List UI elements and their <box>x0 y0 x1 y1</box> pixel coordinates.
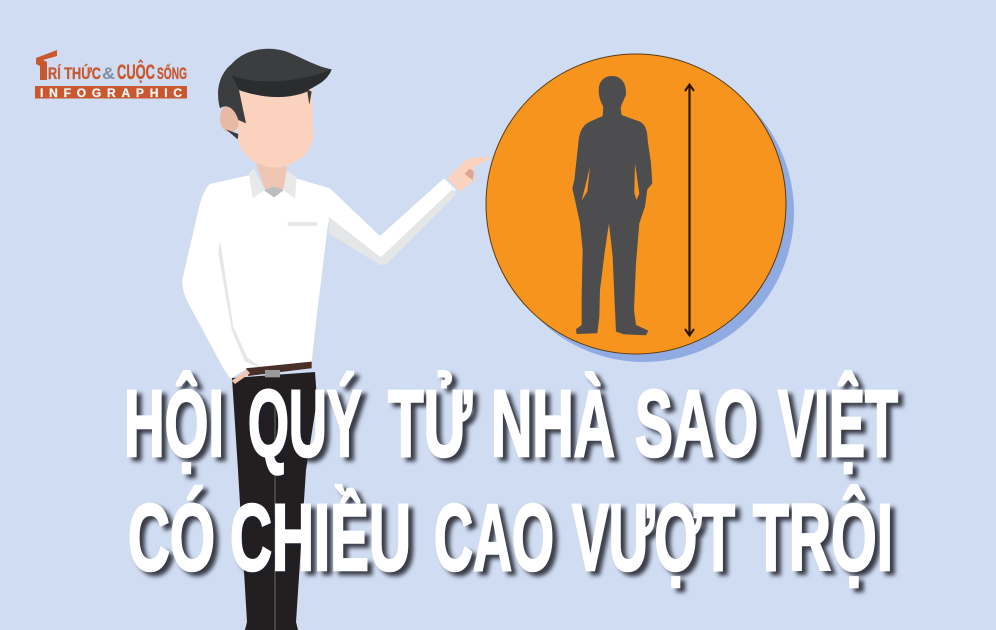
logo: Tri Thuc & Cuoc Song Infographic: CUỘC <box>117 60 155 84</box>
character: man pointing at circle <box>182 49 492 630</box>
title <box>124 371 898 591</box>
title line 1: SAO <box>635 371 758 477</box>
title line 2: VƯỢT <box>572 485 735 591</box>
logo: Tri Thuc & Cuoc Song Infographic: RÍ THỨC <box>48 64 101 83</box>
hair <box>218 49 332 139</box>
shirt <box>182 175 457 378</box>
title line 2 <box>128 485 893 591</box>
title line 2: CÓ <box>128 485 215 591</box>
face <box>238 87 313 167</box>
logo: Tri Thuc & Cuoc Song Infographic: INFOGRAPHIC <box>40 86 182 100</box>
logo: Tri Thuc & Cuoc Song Infographic: & <box>102 64 115 83</box>
belt and buckle <box>246 362 312 377</box>
title line 2: CAO <box>434 485 554 591</box>
trousers <box>232 372 317 630</box>
neck <box>255 160 287 197</box>
pointing hand <box>448 157 492 192</box>
logo: Tri Thuc & Cuoc Song Infographic: SỐNG <box>157 63 187 83</box>
title line 1: HỘI <box>124 371 224 477</box>
title line 1 <box>124 371 898 477</box>
title line 2: CHIỀU <box>230 485 411 591</box>
logo: Tri Thuc & Cuoc Song Infographic <box>35 50 187 100</box>
circle panel with height silhouette <box>486 54 794 362</box>
title line 1: VIỆT <box>778 371 898 477</box>
collar <box>249 169 297 199</box>
title line 1: NHÀ <box>491 371 615 477</box>
title line 1: QUÝ <box>248 371 362 477</box>
ear <box>220 104 240 132</box>
title line 2: TRỘI <box>753 485 893 591</box>
left hand in pocket <box>223 360 250 384</box>
arrow: height measure <box>685 84 694 336</box>
title line 1: TỬ <box>388 371 472 477</box>
icon: man silhouette <box>572 76 652 335</box>
